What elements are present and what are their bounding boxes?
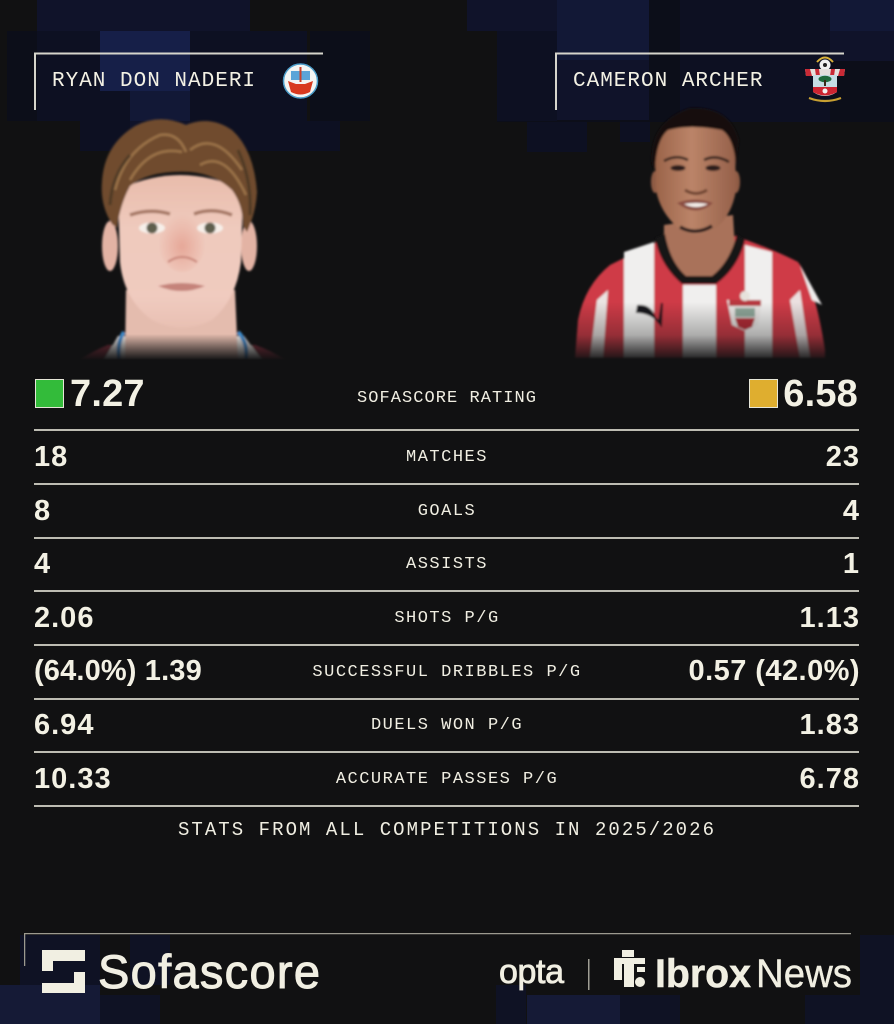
stat: matches: MATCHES: [406, 448, 488, 467]
stat: goals: [34, 495, 860, 527]
icon: Sofascore mark: [42, 950, 85, 993]
icon: Ibrox News mark: [614, 950, 645, 987]
plate border: [34, 52, 323, 110]
stat: shots per game: 1.13: [800, 602, 860, 634]
player name: CAMERON ARCHER: [573, 70, 763, 93]
icon: Southampton crest: [805, 56, 845, 102]
stat: assists: ASSISTS: [406, 555, 488, 574]
Opta wordmark: opta: [499, 953, 564, 991]
rating swatch: green: [35, 379, 64, 408]
player name: RYAN DON NADERI: [52, 70, 256, 93]
stats table: [34, 429, 860, 807]
stat: successful dribbles per game: 0.57 (42.0%): [689, 655, 860, 687]
stat: duels won per game: 6.94: [34, 709, 94, 741]
stat: accurate passes per game: 6.78: [800, 763, 860, 795]
rating swatch: amber: [749, 379, 778, 408]
name plate: Ryan Don Naderi: [34, 52, 323, 110]
name plate: Cameron Archer: [555, 52, 844, 110]
stat: matches: 18: [34, 441, 68, 473]
stat: shots per game: SHOTS P/G: [394, 609, 500, 628]
footer bracket: [24, 933, 851, 966]
stat: goals: 4: [843, 495, 860, 527]
stat: goals: GOALS: [418, 502, 476, 521]
player photo: Cameron Archer: [574, 107, 826, 358]
stat: assists: 4: [34, 548, 51, 580]
stat: accurate passes per game: 10.33: [34, 763, 112, 795]
stat: matches: [34, 441, 860, 473]
footnote: STATS FROM ALL COMPETITIONS IN 2025/2026: [178, 819, 716, 841]
footer logos: [42, 948, 852, 996]
Ibrox News wordmark: Ibrox: [655, 952, 751, 996]
stat: successful dribbles per game: (64.0%) 1.39: [34, 655, 202, 687]
rating value: Archer: 6.58: [783, 373, 858, 415]
stat: successful dribbles per game: [34, 655, 860, 687]
rating label: SOFASCORE RATING: [357, 389, 537, 408]
stat: accurate passes per game: ACCURATE PASSES P/G: [336, 770, 558, 789]
rating value: Naderi: 7.27: [70, 373, 145, 415]
stat: shots per game: [34, 602, 860, 634]
stat: shots per game: 2.06: [34, 602, 94, 634]
rating row: [35, 373, 858, 415]
stat: goals: 8: [34, 495, 51, 527]
plate border: [555, 52, 844, 110]
player photo: Ryan Don Naderi: [86, 118, 280, 359]
stat: duels won per game: [34, 709, 860, 741]
stat: duels won per game: DUELS WON P/G: [371, 716, 523, 735]
stat: matches: 23: [826, 441, 860, 473]
stat: successful dribbles per game: SUCCESSFUL DRIBBLES P/G: [312, 663, 582, 682]
Ibrox News wordmark: News: [756, 952, 852, 996]
stat: accurate passes per game: [34, 763, 860, 795]
icon: Hansa Rostock crest: [282, 63, 318, 99]
stat: assists: [34, 548, 860, 580]
Ibrox News wordmark: [655, 952, 852, 996]
stat: duels won per game: 1.83: [800, 709, 860, 741]
stat: assists: 1: [843, 548, 860, 580]
